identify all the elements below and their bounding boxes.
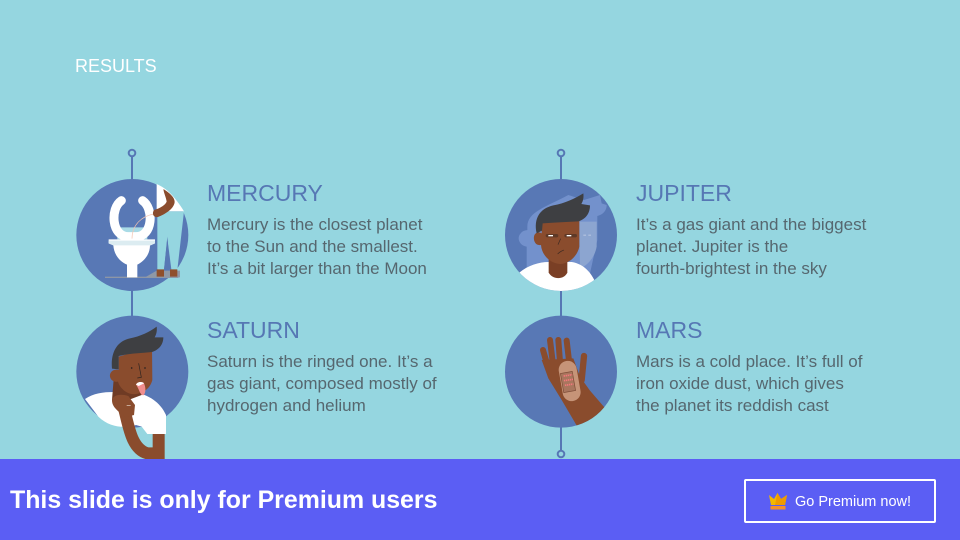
text: Mars description: Mars is a cold place. It’s full of xyxy=(636,352,862,371)
text: Saturn description xyxy=(207,352,437,415)
banner text: This slide is only for Premium users xyxy=(10,486,437,514)
text: Mars description: the planet its reddish cast xyxy=(636,396,829,415)
text: Mercury description: It’s a bit larger than the Moon xyxy=(207,259,427,278)
text: Jupiter description: planet. Jupiter is the xyxy=(636,237,788,256)
panel: Mercury xyxy=(207,180,427,278)
heading: Saturn: SATURN xyxy=(207,317,300,343)
panel: Saturn xyxy=(207,317,437,415)
icon: toilet and man xyxy=(76,179,188,291)
right timeline xyxy=(558,150,564,457)
text: Saturn description: gas giant, composed mostly of xyxy=(207,374,437,393)
icon: crown xyxy=(769,493,787,510)
text: Mercury description: Mercury is the closest planet xyxy=(207,215,422,234)
text: Mars description: iron oxide dust, which gives xyxy=(636,374,844,393)
panel: Mars xyxy=(636,317,862,415)
text: Saturn description: Saturn is the ringed one. It’s a xyxy=(207,352,433,371)
text: Jupiter description: It’s a gas giant and the biggest xyxy=(636,215,866,234)
heading: Mars: MARS xyxy=(636,317,702,343)
text: Saturn description: hydrogen and helium xyxy=(207,396,366,415)
text: Mercury description: to the Sun and the smallest. xyxy=(207,237,418,256)
section title: RESULTS xyxy=(75,56,157,76)
left timeline xyxy=(129,150,135,316)
text: Mars description xyxy=(636,352,862,415)
icon: hand with bandage xyxy=(505,316,617,428)
icon: man with tongue out xyxy=(76,316,188,453)
heading: Jupiter: JUPITER xyxy=(636,180,732,206)
text: Jupiter description: fourth-brightest in the sky xyxy=(636,259,827,278)
illustration layer xyxy=(76,148,617,459)
button label: Go Premium now! xyxy=(795,494,911,510)
heading: Mercury: MERCURY xyxy=(207,180,323,206)
icon: man with blurred double vision xyxy=(505,179,617,297)
premium banner xyxy=(0,459,960,540)
panel: Jupiter xyxy=(636,180,866,278)
text: Jupiter description xyxy=(636,215,866,278)
text: Mercury description xyxy=(207,215,427,278)
button: Go Premium now xyxy=(744,479,936,523)
